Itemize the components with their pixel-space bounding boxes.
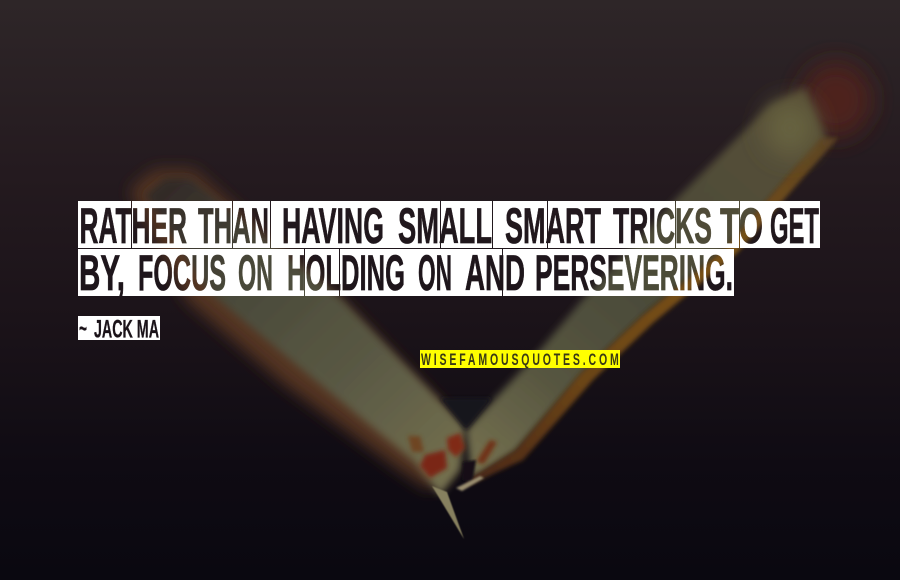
attribution: JACK MA: [94, 316, 159, 344]
quote poster: GET: [770, 198, 819, 254]
attribution: ~: [79, 315, 87, 343]
quote line 2: PERSEVERING.: [535, 245, 733, 301]
right matchstick: [466, 88, 838, 486]
quote line 1: THAN: [198, 198, 269, 254]
quote line 1: TRICKS: [613, 198, 712, 254]
quote line 2: [78, 245, 734, 301]
attribution: [78, 315, 160, 344]
quote line 2: AND: [465, 245, 525, 301]
orange edge: [466, 138, 838, 486]
tip sliver: [432, 486, 464, 539]
quote line 1: SMALL: [398, 198, 492, 254]
quote line 1: SMART: [505, 198, 601, 254]
bright spot: [764, 100, 816, 156]
quote line 2: FOCUS: [138, 245, 226, 301]
quote line 2: ON: [418, 245, 452, 301]
quote line 2: HOLDING: [287, 245, 405, 301]
quote line 1: HAVING: [282, 198, 384, 254]
quote line 1: RATHER: [80, 198, 187, 254]
charred ember tips: [408, 398, 497, 491]
quote text: [78, 198, 820, 344]
match head glow: [800, 62, 872, 138]
quote line 2: ON: [238, 245, 273, 301]
quote line 1: [78, 198, 820, 254]
quote line 1: TO: [720, 198, 763, 254]
left matchstick: [130, 170, 465, 539]
watermark: WISEFAMOUSQUOTES.COM: [421, 349, 619, 369]
quote line 2: BY,: [79, 245, 125, 301]
